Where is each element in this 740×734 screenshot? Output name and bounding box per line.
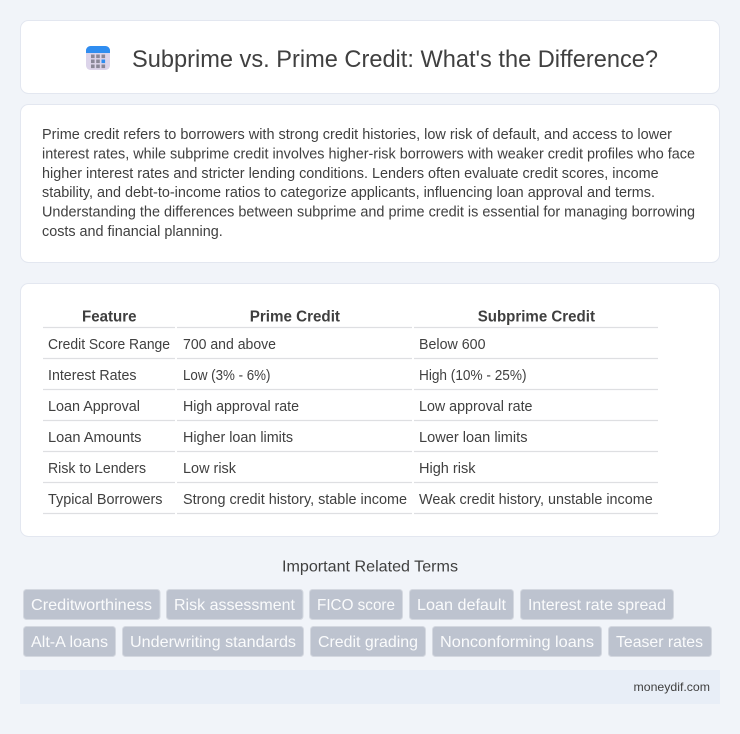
row: typical borrowers: Strong credit history, stable income [183,492,407,508]
footer bar [20,670,720,704]
row: credit score range: 700 and above [183,337,276,353]
row: credit score range: Below 600 [419,337,486,353]
tag: loan default: Loan default [417,597,507,614]
table header: Subprime Credit [478,308,596,326]
row: typical borrowers [48,492,653,508]
tag: alt-a loans: Alt-A loans [31,634,108,651]
row: loan amounts [48,430,528,446]
tag: creditworthiness [24,590,160,620]
text block: intro paragraph: higher interest rates and stricter lending conditions. Lenders often evaluate credit scores, income [42,166,659,182]
tag: underwriting standards: Underwriting standards [130,634,296,651]
row: loan approval: Low approval rate [419,399,532,415]
row: interest rates: Low (3% - 6%) [183,368,270,384]
text block: intro paragraph [42,127,695,240]
footer source: moneydif.com [634,680,710,694]
row: loan amounts: Loan Amounts [48,430,142,446]
tag: teaser rates [608,626,712,656]
text block: intro paragraph: Understanding the differences between subprime and prime credit is essential for managing borrowing [42,204,695,220]
row: interest rates [48,368,526,384]
table header [82,308,596,326]
tag: interest rate spread: Interest rate spread [528,597,666,614]
tag: alt-a loans [24,626,116,656]
tag: risk assessment [166,590,303,620]
text block: intro paragraph: Prime credit refers to borrowers with strong credit histories, low risk of default, and access to lower [42,127,672,143]
tag: credit grading [310,626,426,656]
title: Subprime vs. Prime Credit: What's the Difference? [132,46,658,73]
row: interest rates: Interest Rates [48,368,136,384]
table header: Prime Credit [250,308,341,326]
tag: fico score: FICO score [317,597,395,614]
tag: fico score [310,590,402,620]
row: credit score range: Credit Score Range [48,337,170,353]
related term tags [24,590,712,656]
row: risk to lenders: High risk [419,461,476,477]
row: loan amounts: Higher loan limits [183,430,293,446]
tag: teaser rates: Teaser rates [616,634,703,651]
tag: creditworthiness: Creditworthiness [31,597,152,614]
row: interest rates: High (10% - 25%) [419,368,526,384]
row: risk to lenders: Risk to Lenders [48,461,146,477]
tag: interest rate spread [520,590,674,620]
row: risk to lenders: Low risk [183,461,237,477]
text block: intro paragraph: stability, and debt-to-income ratios to categorize applicants, influencing loan approval and terms. [42,185,655,201]
row: loan approval: Loan Approval [48,399,140,415]
tag: loan default [410,590,514,620]
panel: introduction [20,104,720,262]
panel: comparison table [20,284,720,536]
tag: nonconforming loans [432,626,602,656]
row: loan amounts: Lower loan limits [419,430,528,446]
text block: intro paragraph: costs and financial planning. [42,224,223,240]
tag: risk assessment: Risk assessment [174,597,296,614]
row: credit score range [48,337,486,353]
row: typical borrowers: Weak credit history, unstable income [419,492,653,508]
text block: intro paragraph: interest rates, while subprime credit involves higher-risk borrowers with weaker credit profiles who face [42,146,695,162]
table header: Feature [82,308,137,326]
row: loan approval [48,399,532,415]
heading: related terms: Important Related Terms [282,558,458,576]
tag: underwriting standards [122,626,304,656]
tag: credit grading: Credit grading [318,634,418,651]
row: risk to lenders [48,461,476,477]
row: typical borrowers: Typical Borrowers [48,492,162,508]
tag: nonconforming loans: Nonconforming loans [440,634,594,651]
icon: calendar [86,46,110,70]
header panel [20,20,720,94]
row: loan approval: High approval rate [183,399,299,415]
